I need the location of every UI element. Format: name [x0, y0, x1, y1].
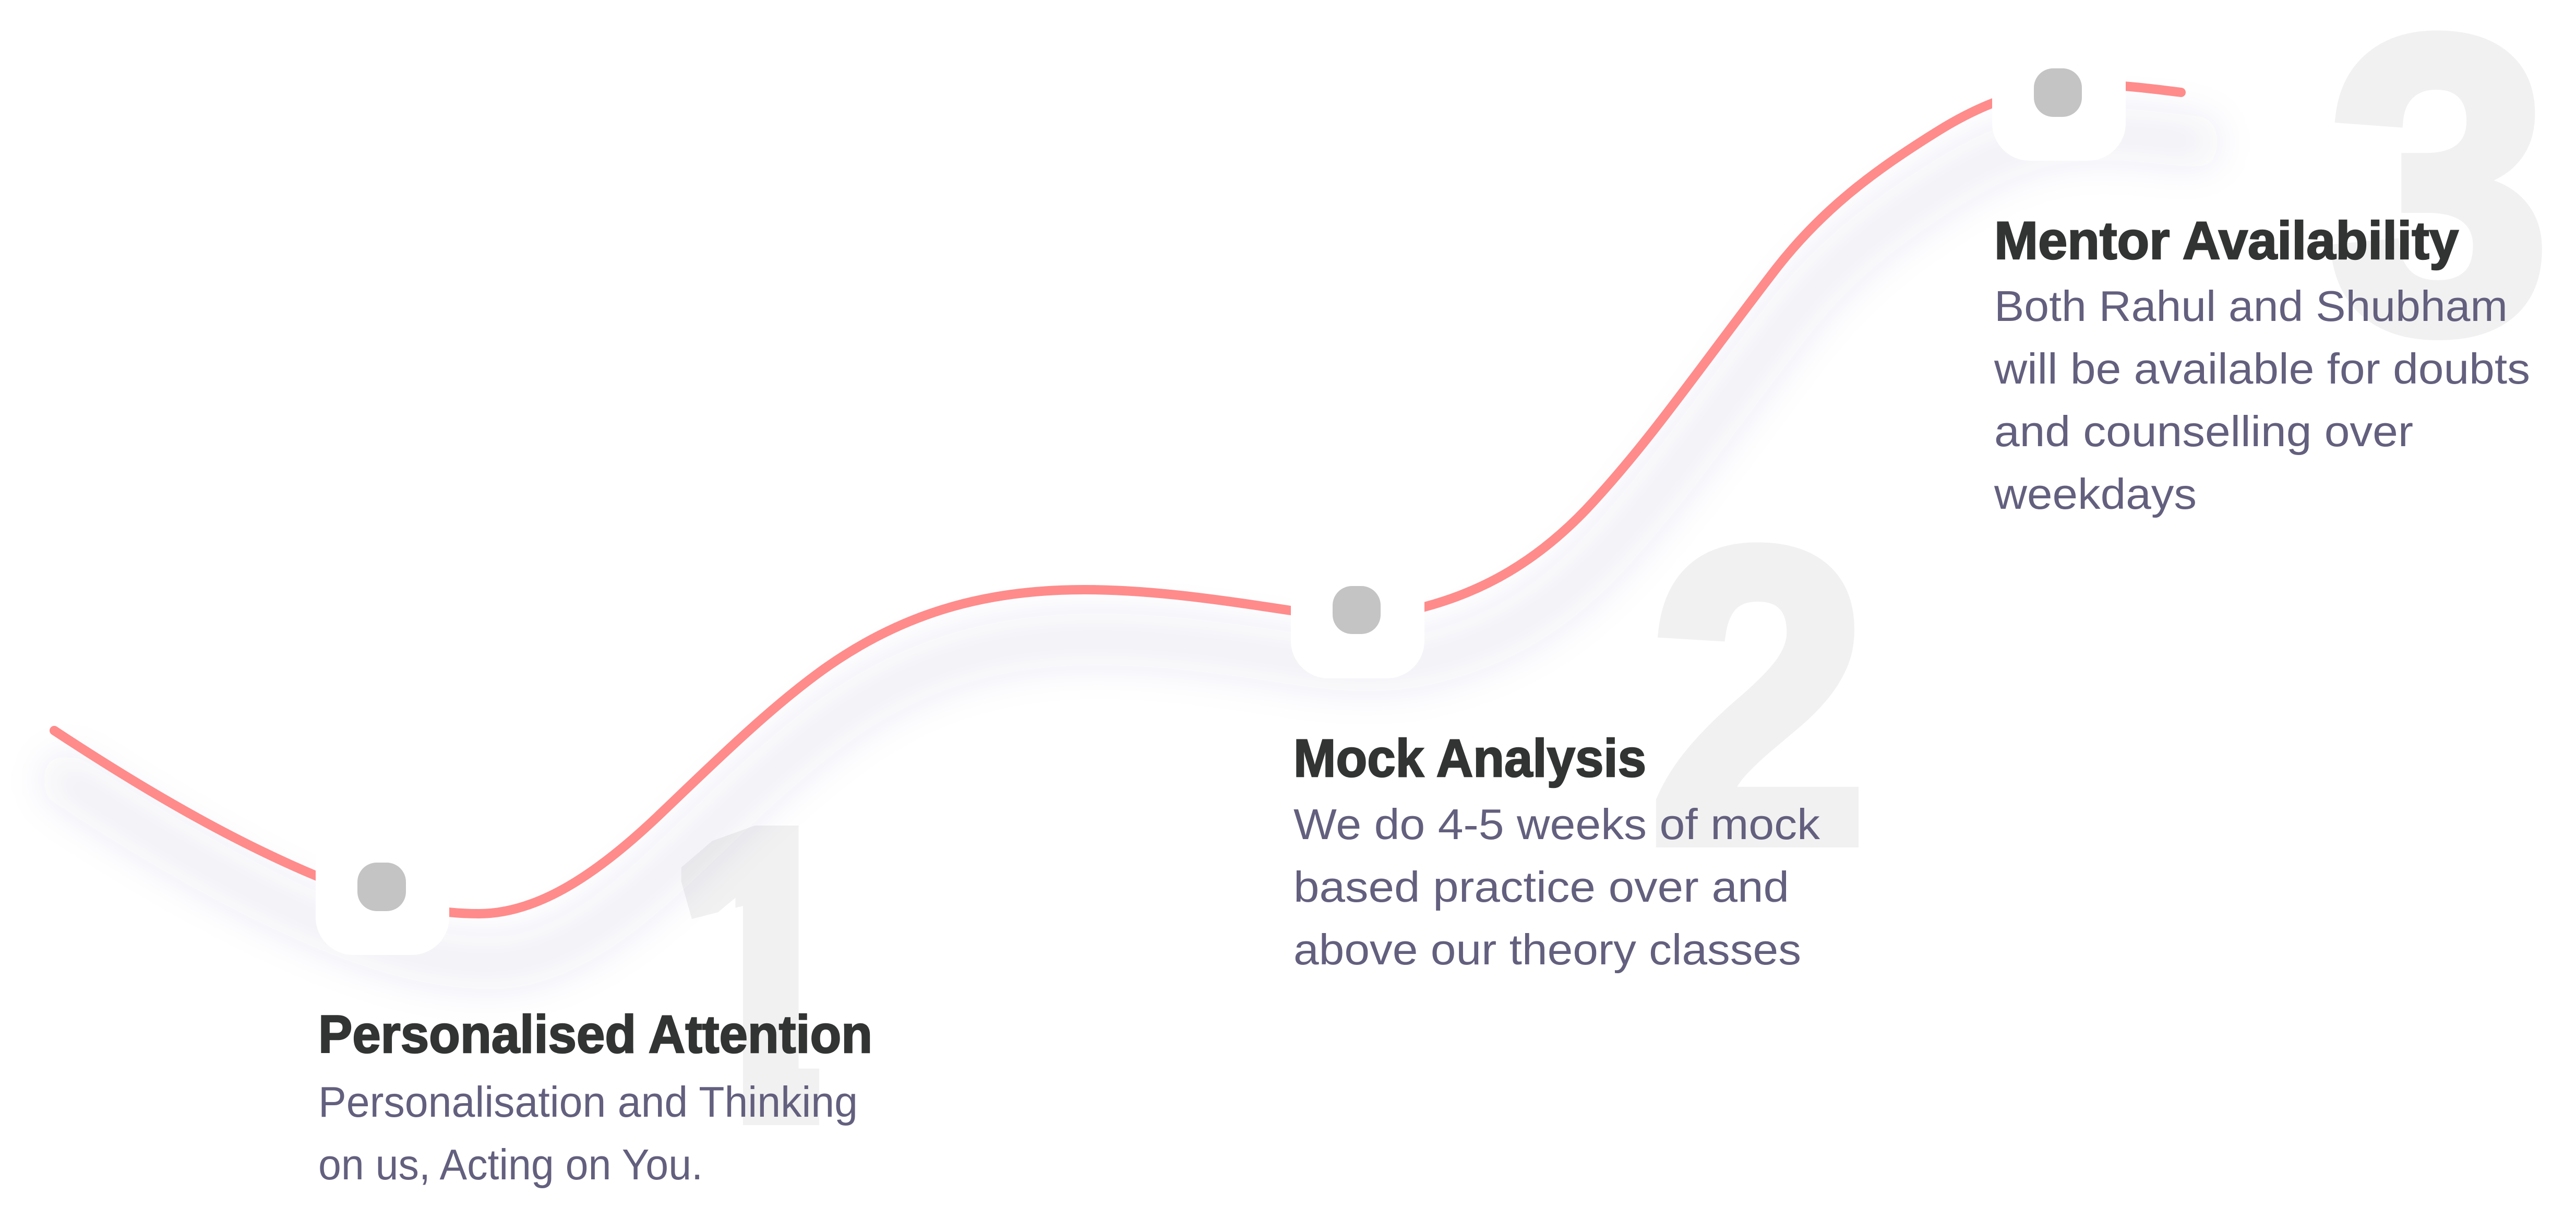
- marker 2: [1291, 545, 1424, 678]
- body: and counselling over: and counselling over: [1994, 407, 2413, 456]
- marker 3: [1992, 27, 2126, 161]
- body: on us, Acting on You.: on us, Acting on You.: [318, 1140, 703, 1189]
- big number 1: 1: [668, 731, 850, 1217]
- heading: Mock Analysis: Mock Analysis: [1293, 728, 1646, 788]
- marker 1: [316, 821, 449, 955]
- body: We do 4-5 weeks of mock: We do 4-5 weeks of mock: [1293, 800, 1820, 848]
- step 2 text: [1293, 728, 1820, 974]
- heading: Mentor Availability: Mentor Availability: [1994, 211, 2459, 270]
- progress curve: [54, 85, 2181, 914]
- step 1 text: [318, 1005, 872, 1189]
- body: will be available for doubts: will be available for doubts: [1994, 344, 2530, 393]
- big number 2: 2: [1649, 463, 1868, 929]
- heading: Personalised Attention: Personalised Attention: [318, 1005, 872, 1064]
- body: weekdays: weekdays: [1994, 470, 2197, 518]
- step 3 text: [1994, 211, 2530, 518]
- curve shadow: [67, 134, 2194, 963]
- body: Both Rahul and Shubham: Both Rahul and Shubham: [1994, 282, 2508, 330]
- body: based practice over and: based practice over and: [1293, 863, 1789, 911]
- body: Personalisation and Thinking: Personalisation and Thinking: [318, 1078, 858, 1126]
- body: above our theory classes: above our theory classes: [1293, 925, 1801, 974]
